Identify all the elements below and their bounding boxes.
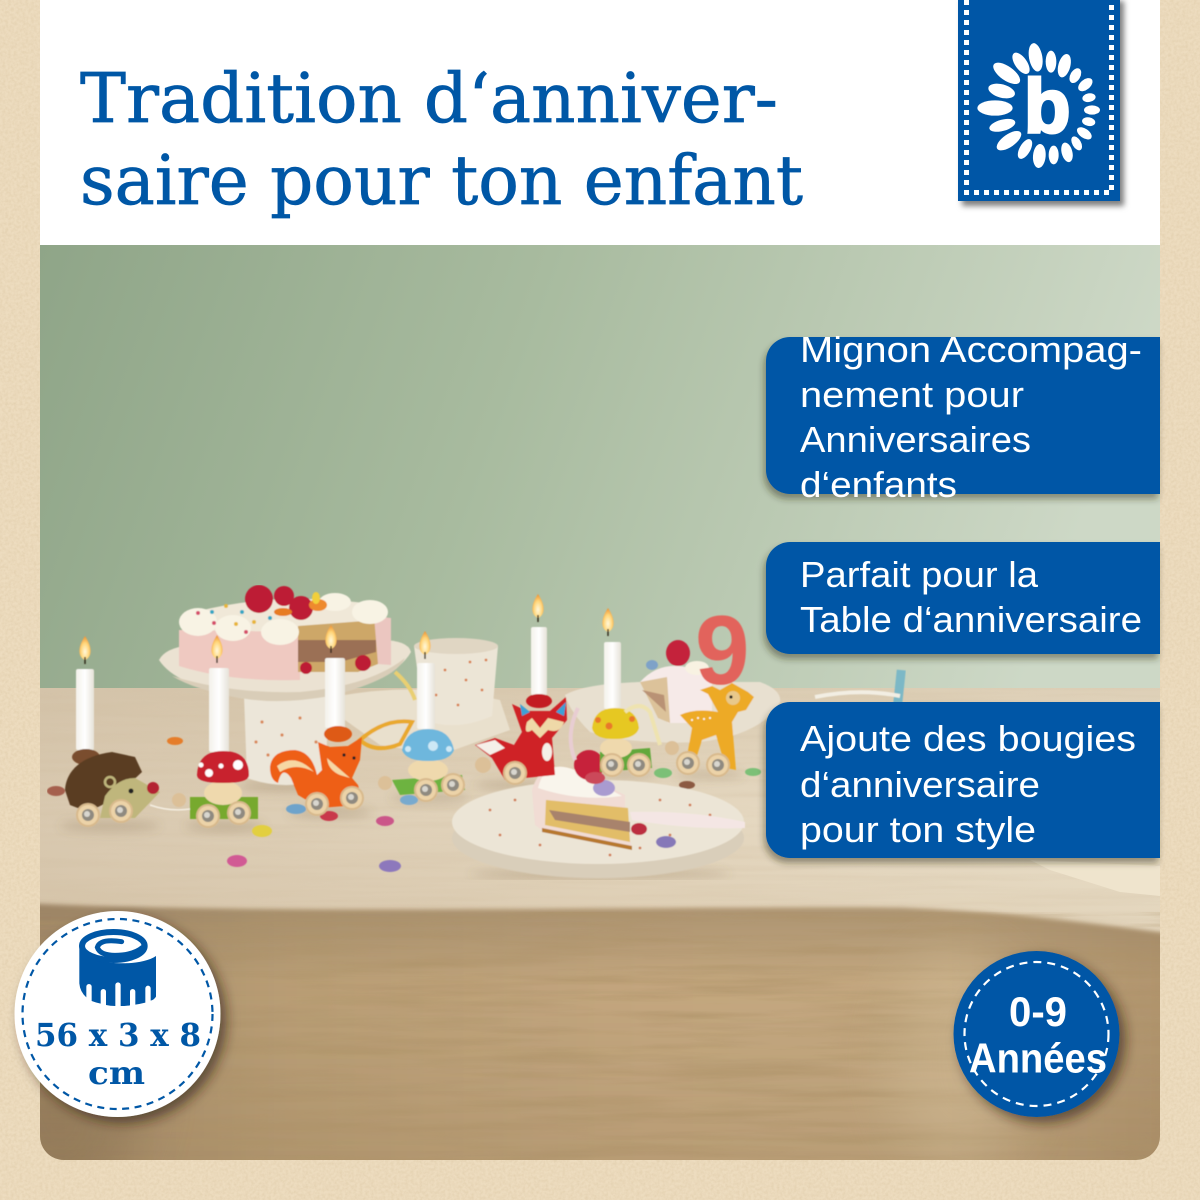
icon: measuring tape [79,932,156,1006]
feature text: pour ton style [800,809,1036,850]
hedgehog [65,752,160,827]
candle 1 with hedgehog [65,636,160,827]
dimensions text: 56 x 3 x 8 [35,1016,201,1054]
number nine: 9 [695,595,750,705]
contact shadows [60,771,744,880]
feature text: d‘enfants [800,464,957,505]
candy [47,737,761,872]
red fox [475,697,567,785]
white fabric and ribbon [345,672,510,755]
deer [665,683,754,777]
striped straw [815,670,906,704]
table top cloth [40,688,1160,945]
age text: Années [969,1034,1107,1082]
cake slice [532,750,632,850]
wall [40,245,1160,705]
logo tag [958,0,1120,201]
speckled cup [414,638,498,725]
table cloth drop [40,902,1160,1160]
big cake [179,585,391,680]
dimensions text: cm [88,1054,145,1092]
age badge [954,951,1120,1117]
candle 2 with red mushroom [150,635,258,828]
feature text: Parfait pour la [800,554,1039,595]
photo: birthday table [0,245,1170,1200]
title: Tradition d‘anniver- [80,60,778,139]
candle 5 with red fox [475,594,567,785]
dimensions badge [14,911,220,1117]
candle 4 with blue mushroom [378,631,465,802]
candle 6 with yellow mushroom [571,608,660,777]
feature banner: table [766,542,1160,654]
feature text: d‘anniversaire [800,764,1040,805]
feature text: Mignon Accompag- [800,329,1142,370]
feature text: Ajoute des bougies [800,718,1136,759]
feature text: Table d‘anniversaire [800,599,1142,640]
feature text: nement pour [800,374,1024,415]
cake stand [159,640,411,785]
feature text: Anniversaires [800,419,1031,460]
squirrel [270,737,364,816]
front plate [452,780,745,878]
candle 3 with squirrel [270,625,364,816]
icon: sunburst logo petals [977,42,1100,169]
back plate and slice [565,640,780,743]
feature banner: bougies [766,702,1160,858]
logo letter: b [1024,64,1070,149]
age text: 0-9 [1009,988,1067,1035]
header panel [40,0,1160,245]
title: saire pour ton enfant [80,142,803,221]
feature banner: accompagnement [766,329,1160,505]
title [80,60,803,221]
